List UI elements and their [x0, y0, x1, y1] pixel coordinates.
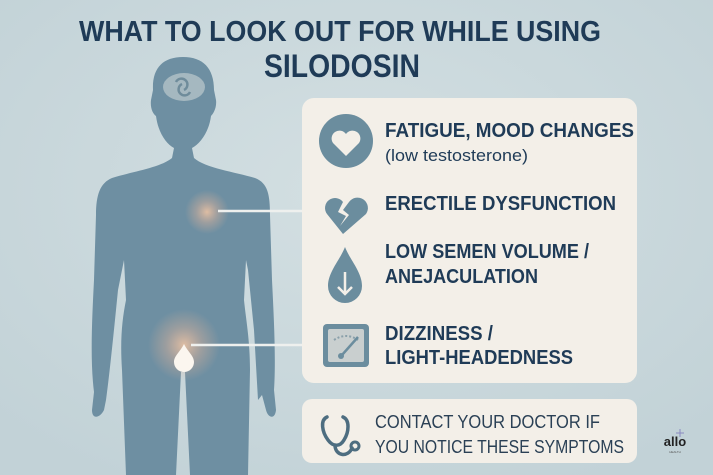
- glow: groin: [148, 309, 220, 381]
- icon: drop on body: [174, 344, 194, 372]
- text: contact: CONTACT YOUR DOCTOR IF: [375, 412, 600, 432]
- connector lines: [191, 211, 304, 345]
- title: SILODOSIN: [264, 48, 420, 84]
- body silhouette: [92, 57, 276, 475]
- icon: heart circle: [319, 114, 373, 168]
- icon: broken heart: [325, 198, 368, 234]
- text: fatigue: [385, 120, 634, 165]
- panel: symptoms: [302, 98, 637, 383]
- text: fatigue: FATIGUE, MOOD CHANGES: [385, 120, 634, 142]
- text: dizziness: LIGHT-HEADEDNESS: [385, 347, 573, 369]
- text: semen: ANEJACULATION: [385, 266, 538, 288]
- text: semen: [385, 241, 589, 288]
- icon: brain: [163, 73, 205, 101]
- text: contact: [375, 412, 624, 457]
- text: dizziness: [385, 323, 573, 369]
- icon: drop with arrow: [328, 247, 362, 303]
- glow: chest: [185, 190, 229, 234]
- text: semen: LOW SEMEN VOLUME /: [385, 241, 589, 263]
- logo: allo: [664, 434, 686, 449]
- logo: [664, 429, 686, 454]
- icon: stethoscope: [323, 417, 352, 454]
- icon: gauge: [323, 324, 369, 367]
- title: WHAT TO LOOK OUT FOR WHILE USING: [79, 16, 601, 48]
- title: [79, 16, 601, 84]
- text: dizziness: DIZZINESS /: [385, 323, 493, 345]
- logo: HEALTH: [669, 450, 681, 454]
- text: fatigue: (low testosterone): [385, 146, 528, 165]
- text: erectile: ERECTILE DYSFUNCTION: [385, 193, 616, 215]
- text: contact: YOU NOTICE THESE SYMPTOMS: [375, 437, 624, 457]
- panel: contact doctor: [302, 399, 637, 463]
